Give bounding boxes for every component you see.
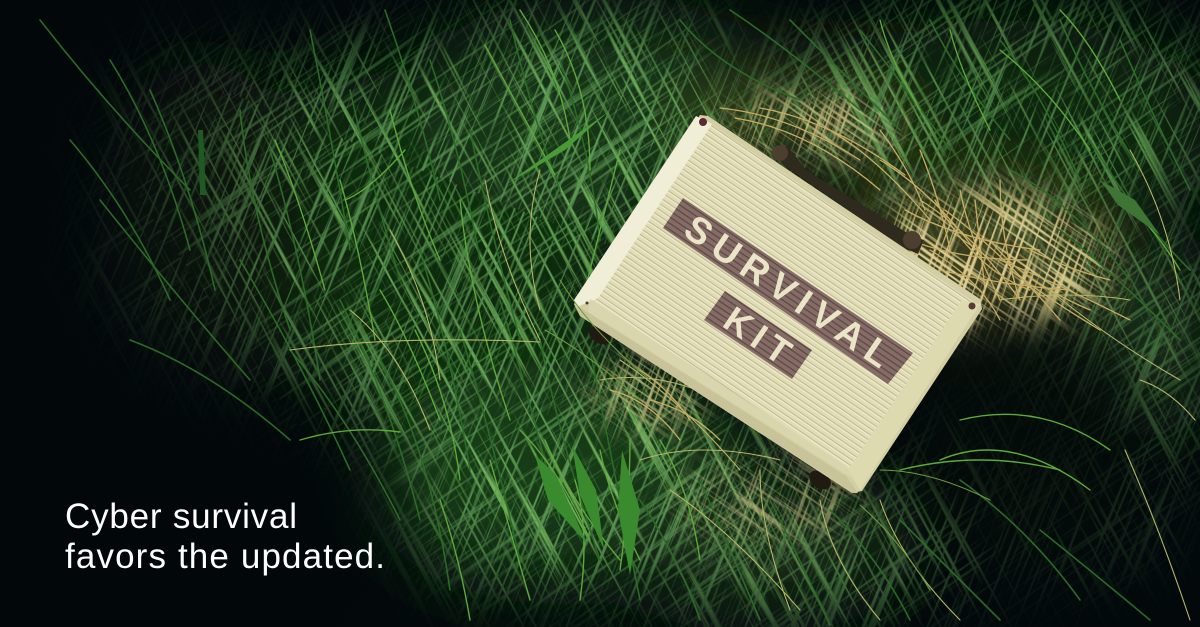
grass blades: bright green	[275, 10, 1180, 620]
corners	[699, 118, 707, 126]
case lower side wall	[574, 304, 858, 493]
dry straw patch	[610, 108, 1130, 440]
wide sunlit blades	[198, 112, 1160, 575]
case lid	[592, 122, 974, 472]
survival kit briefcase	[574, 115, 982, 493]
right rim	[848, 300, 980, 490]
tagline: Cyber survival	[65, 497, 297, 536]
survival label: SURVIVAL	[677, 207, 898, 376]
lower rim	[588, 299, 852, 478]
kit label	[704, 291, 812, 379]
kit label: KIT	[716, 298, 799, 373]
tagline: favors the updated.	[65, 537, 385, 576]
case body	[574, 115, 982, 493]
grass blades: pale dry highlights	[290, 150, 1195, 620]
latches and hinges	[586, 145, 924, 493]
light rim on left edge	[574, 116, 712, 307]
foreground blades over case edge	[545, 280, 990, 590]
grass texture: dry straw streak layers	[568, 71, 1136, 564]
